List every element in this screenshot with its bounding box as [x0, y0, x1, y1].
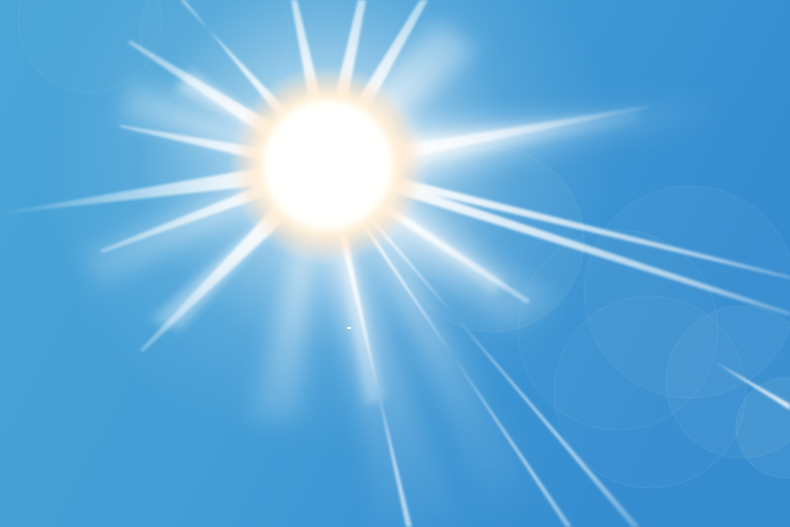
broad soft rays [80, 20, 720, 527]
short sharp rays [0, 0, 650, 352]
small speck [347, 327, 351, 329]
medium soft rays [150, 70, 640, 405]
flare streak [715, 362, 790, 410]
soft haze around the sun [38, 0, 618, 455]
sun disc and warm glow [228, 65, 428, 265]
long sharp rays [320, 160, 790, 527]
